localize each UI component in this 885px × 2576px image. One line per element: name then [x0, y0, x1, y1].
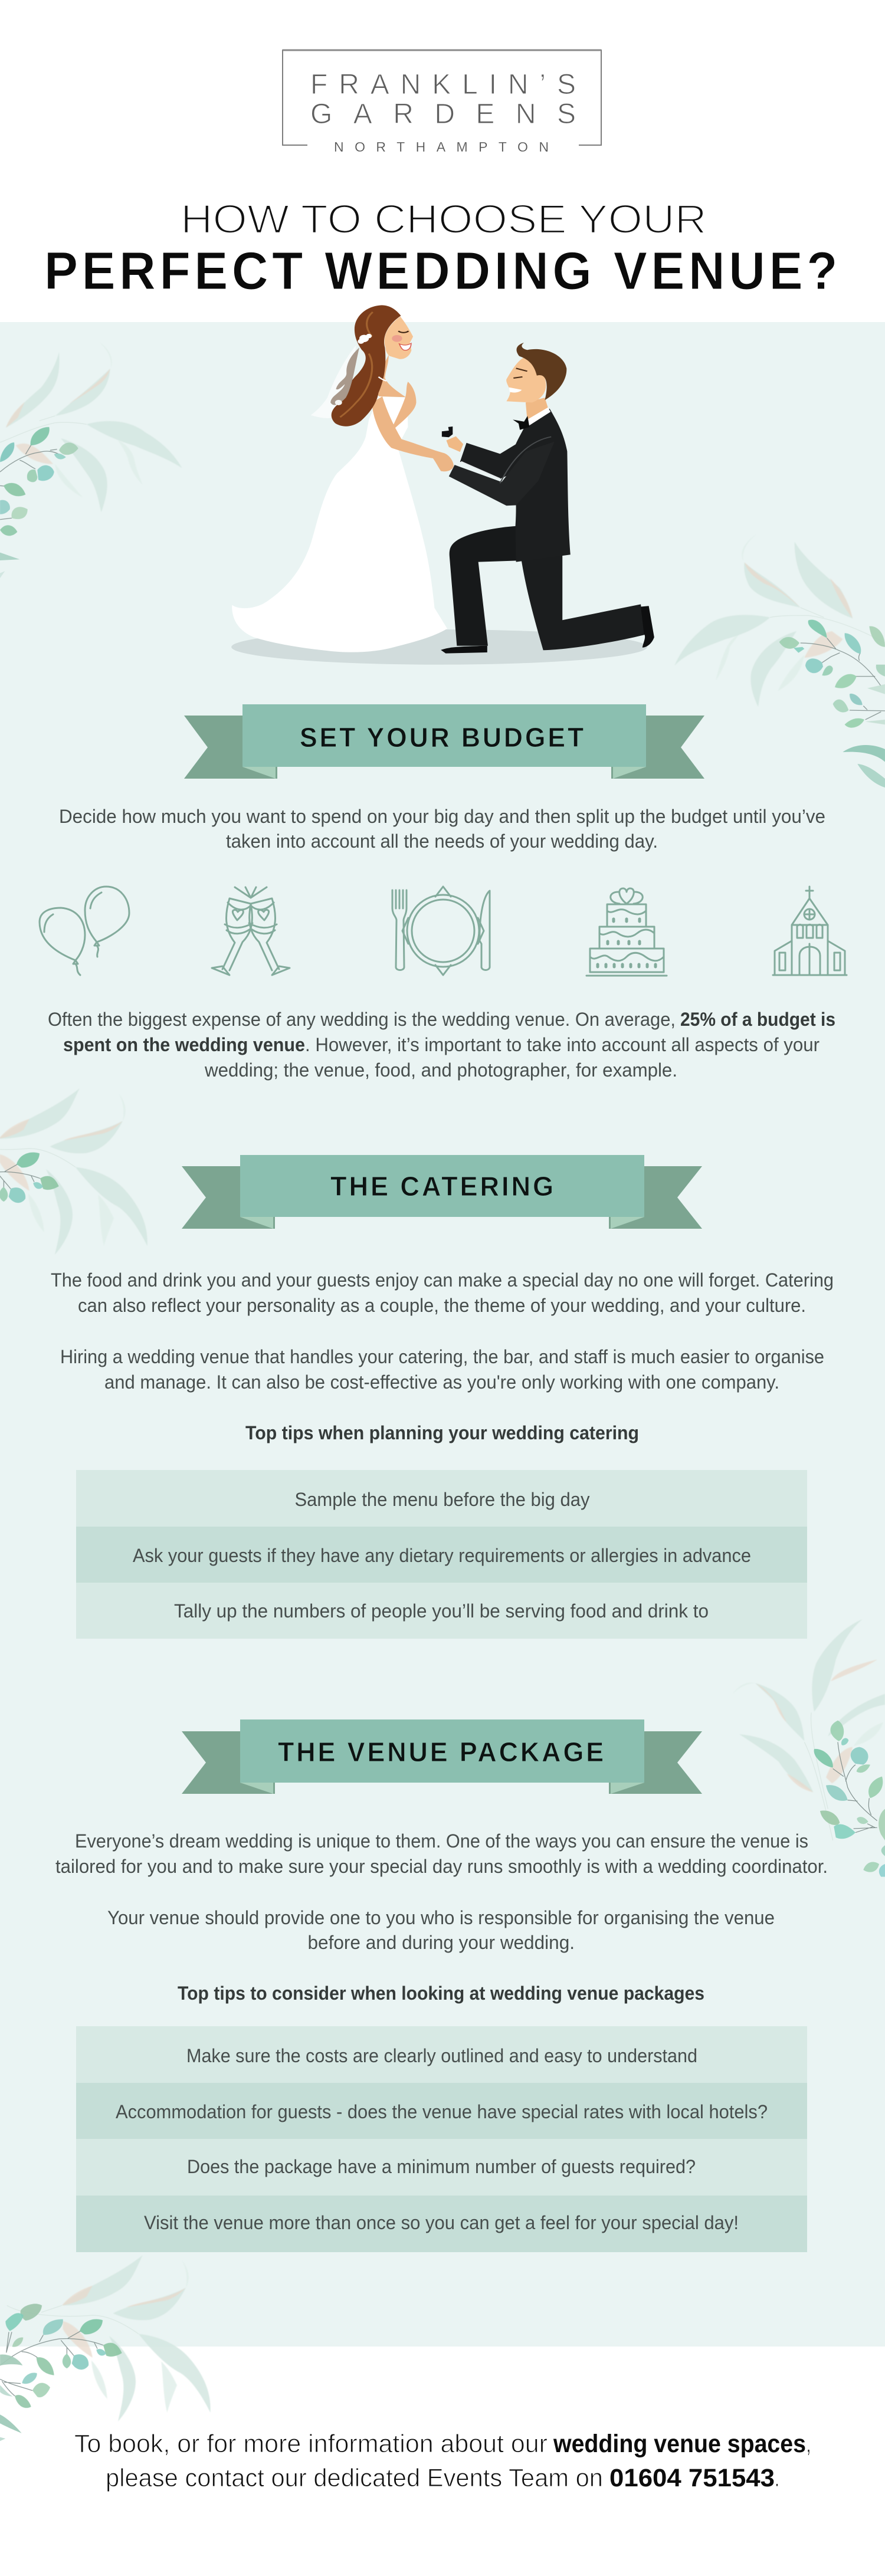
logo: NORTHAMPTON [334, 139, 549, 155]
title: HOW TO CHOOSE YOUR [181, 196, 707, 242]
groom smile [509, 388, 522, 393]
banner: set your budget [184, 704, 704, 779]
collar [527, 408, 550, 426]
banner: the venue package [182, 1719, 702, 1794]
decorative sprig: bottom left [0, 2255, 211, 2441]
logo: FRANKLIN’S [310, 69, 576, 100]
footer call to action [74, 2430, 811, 2492]
tips table: catering: Tally up the numbers of people you’ll be serving food and drink to [174, 1600, 709, 1622]
title: PERFECT WEDDING VENUE? [44, 242, 841, 301]
neck and face [526, 398, 548, 419]
footer call to action: . [775, 2464, 779, 2492]
bride hair [332, 305, 401, 426]
groom hair [516, 343, 566, 400]
text block: venue package intro: tailored for you and to make sure your special day runs smoothly is with a wedding coordinator. [55, 1856, 828, 1877]
bride face [385, 316, 413, 359]
footer call to action: 01604 751543 [609, 2464, 775, 2492]
hair flower [358, 334, 372, 344]
text block: venue expense: wedding; the venue, food, and photographer, for example. [204, 1059, 677, 1081]
icon: wedding cake [586, 888, 667, 976]
icon: balloons [40, 887, 129, 975]
text block: catering intro [51, 1269, 834, 1393]
text block: venue expense: Often the biggest expense of any wedding is the wedding venue. On average, [48, 1009, 676, 1030]
text block: venue package intro: before and during your wedding. [308, 1932, 575, 1953]
tips table: venue package: Make sure the costs are clearly outlined and easy to understand [186, 2045, 697, 2066]
text block: venue package intro: Your venue should provide one to you who is responsible for organising the venue [107, 1907, 775, 1928]
tips table: venue package: Accommodation for guests - does the venue have special rates with local hotels? [116, 2101, 768, 2122]
subheading: venue package tips: Top tips to consider when looking at wedding venue packages [178, 1983, 704, 2004]
tips table: catering [76, 1470, 807, 1639]
text block: venue package intro: Everyone’s dream wedding is unique to them. One of the ways you can ensure the venue is [75, 1830, 808, 1852]
text block: venue expense [48, 1009, 835, 1081]
footer call to action: , [806, 2430, 811, 2458]
tips table: venue package: Does the package have a minimum number of guests required? [187, 2156, 696, 2177]
text block: catering intro: and manage. It can also be cost-effective as you're only working with one company. [104, 1371, 779, 1393]
decorative sprig: left of catering [0, 1088, 148, 1274]
icon: champagne flutes [212, 887, 290, 975]
banner: the catering [182, 1155, 702, 1229]
text block: venue expense: spent on the wedding venue [63, 1034, 305, 1055]
bride neck, chest and arms [372, 355, 454, 471]
banner: set your budget: SET YOUR BUDGET [300, 722, 586, 753]
text block: venue expense: 25% of a budget is [680, 1009, 835, 1030]
text block: catering intro: The food and drink you and your guests enjoy can make a special day no one will forget. Catering [51, 1269, 834, 1291]
veil [311, 345, 356, 418]
icon: place setting [392, 887, 490, 975]
text block: catering intro: can also reflect your personality as a couple, the theme of your wedding, and your culture. [78, 1295, 806, 1316]
footer call to action: To book, or for more information about our [74, 2430, 548, 2458]
decorative sprig: top left [0, 342, 182, 578]
text block: catering intro: Hiring a wedding venue that handles your catering, the bar, and staff is much easier to organise [60, 1346, 824, 1367]
tips table: venue package: Visit the venue more than once so you can get a feel for your special day! [144, 2212, 739, 2233]
banner: the catering: THE CATERING [330, 1171, 556, 1202]
veil drape [330, 347, 359, 405]
text block: budget intro: taken into account all the needs of your wedding day. [226, 831, 658, 852]
dress [232, 396, 447, 652]
hand with ring box [446, 437, 463, 452]
subheading: catering tips: Top tips when planning your wedding catering [245, 1422, 639, 1443]
illustration: bride and groom proposal [231, 305, 654, 665]
necklace [379, 377, 386, 381]
banner: the venue package: THE VENUE PACKAGE [278, 1737, 606, 1767]
tips table: catering: Sample the menu before the big day [295, 1489, 590, 1510]
text block: venue package intro [55, 1830, 828, 1953]
footer call to action: please contact our dedicated Events Team on [106, 2464, 603, 2492]
tips table: venue package [76, 2026, 807, 2252]
logo [283, 50, 601, 155]
text block: budget intro: Decide how much you want to spend on your big day and then split up the budget until you’ve [59, 806, 825, 827]
logo: GARDENS [310, 99, 576, 130]
page background panel [0, 322, 885, 2347]
text block: venue expense: . However, it’s important to take into account all aspects of your [305, 1034, 820, 1055]
bow tie [513, 416, 529, 430]
decorative sprig: right of venue package [733, 1619, 885, 1877]
ground shadow [231, 629, 647, 665]
icon: church [773, 887, 847, 975]
groom [441, 343, 654, 654]
text block: budget intro [59, 806, 825, 852]
title [44, 196, 841, 301]
tips table: catering: Ask your guests if they have any dietary requirements or allergies in advance [133, 1545, 751, 1566]
decorative sprig: right of couple [674, 534, 885, 787]
footer call to action: wedding venue spaces [553, 2430, 806, 2458]
